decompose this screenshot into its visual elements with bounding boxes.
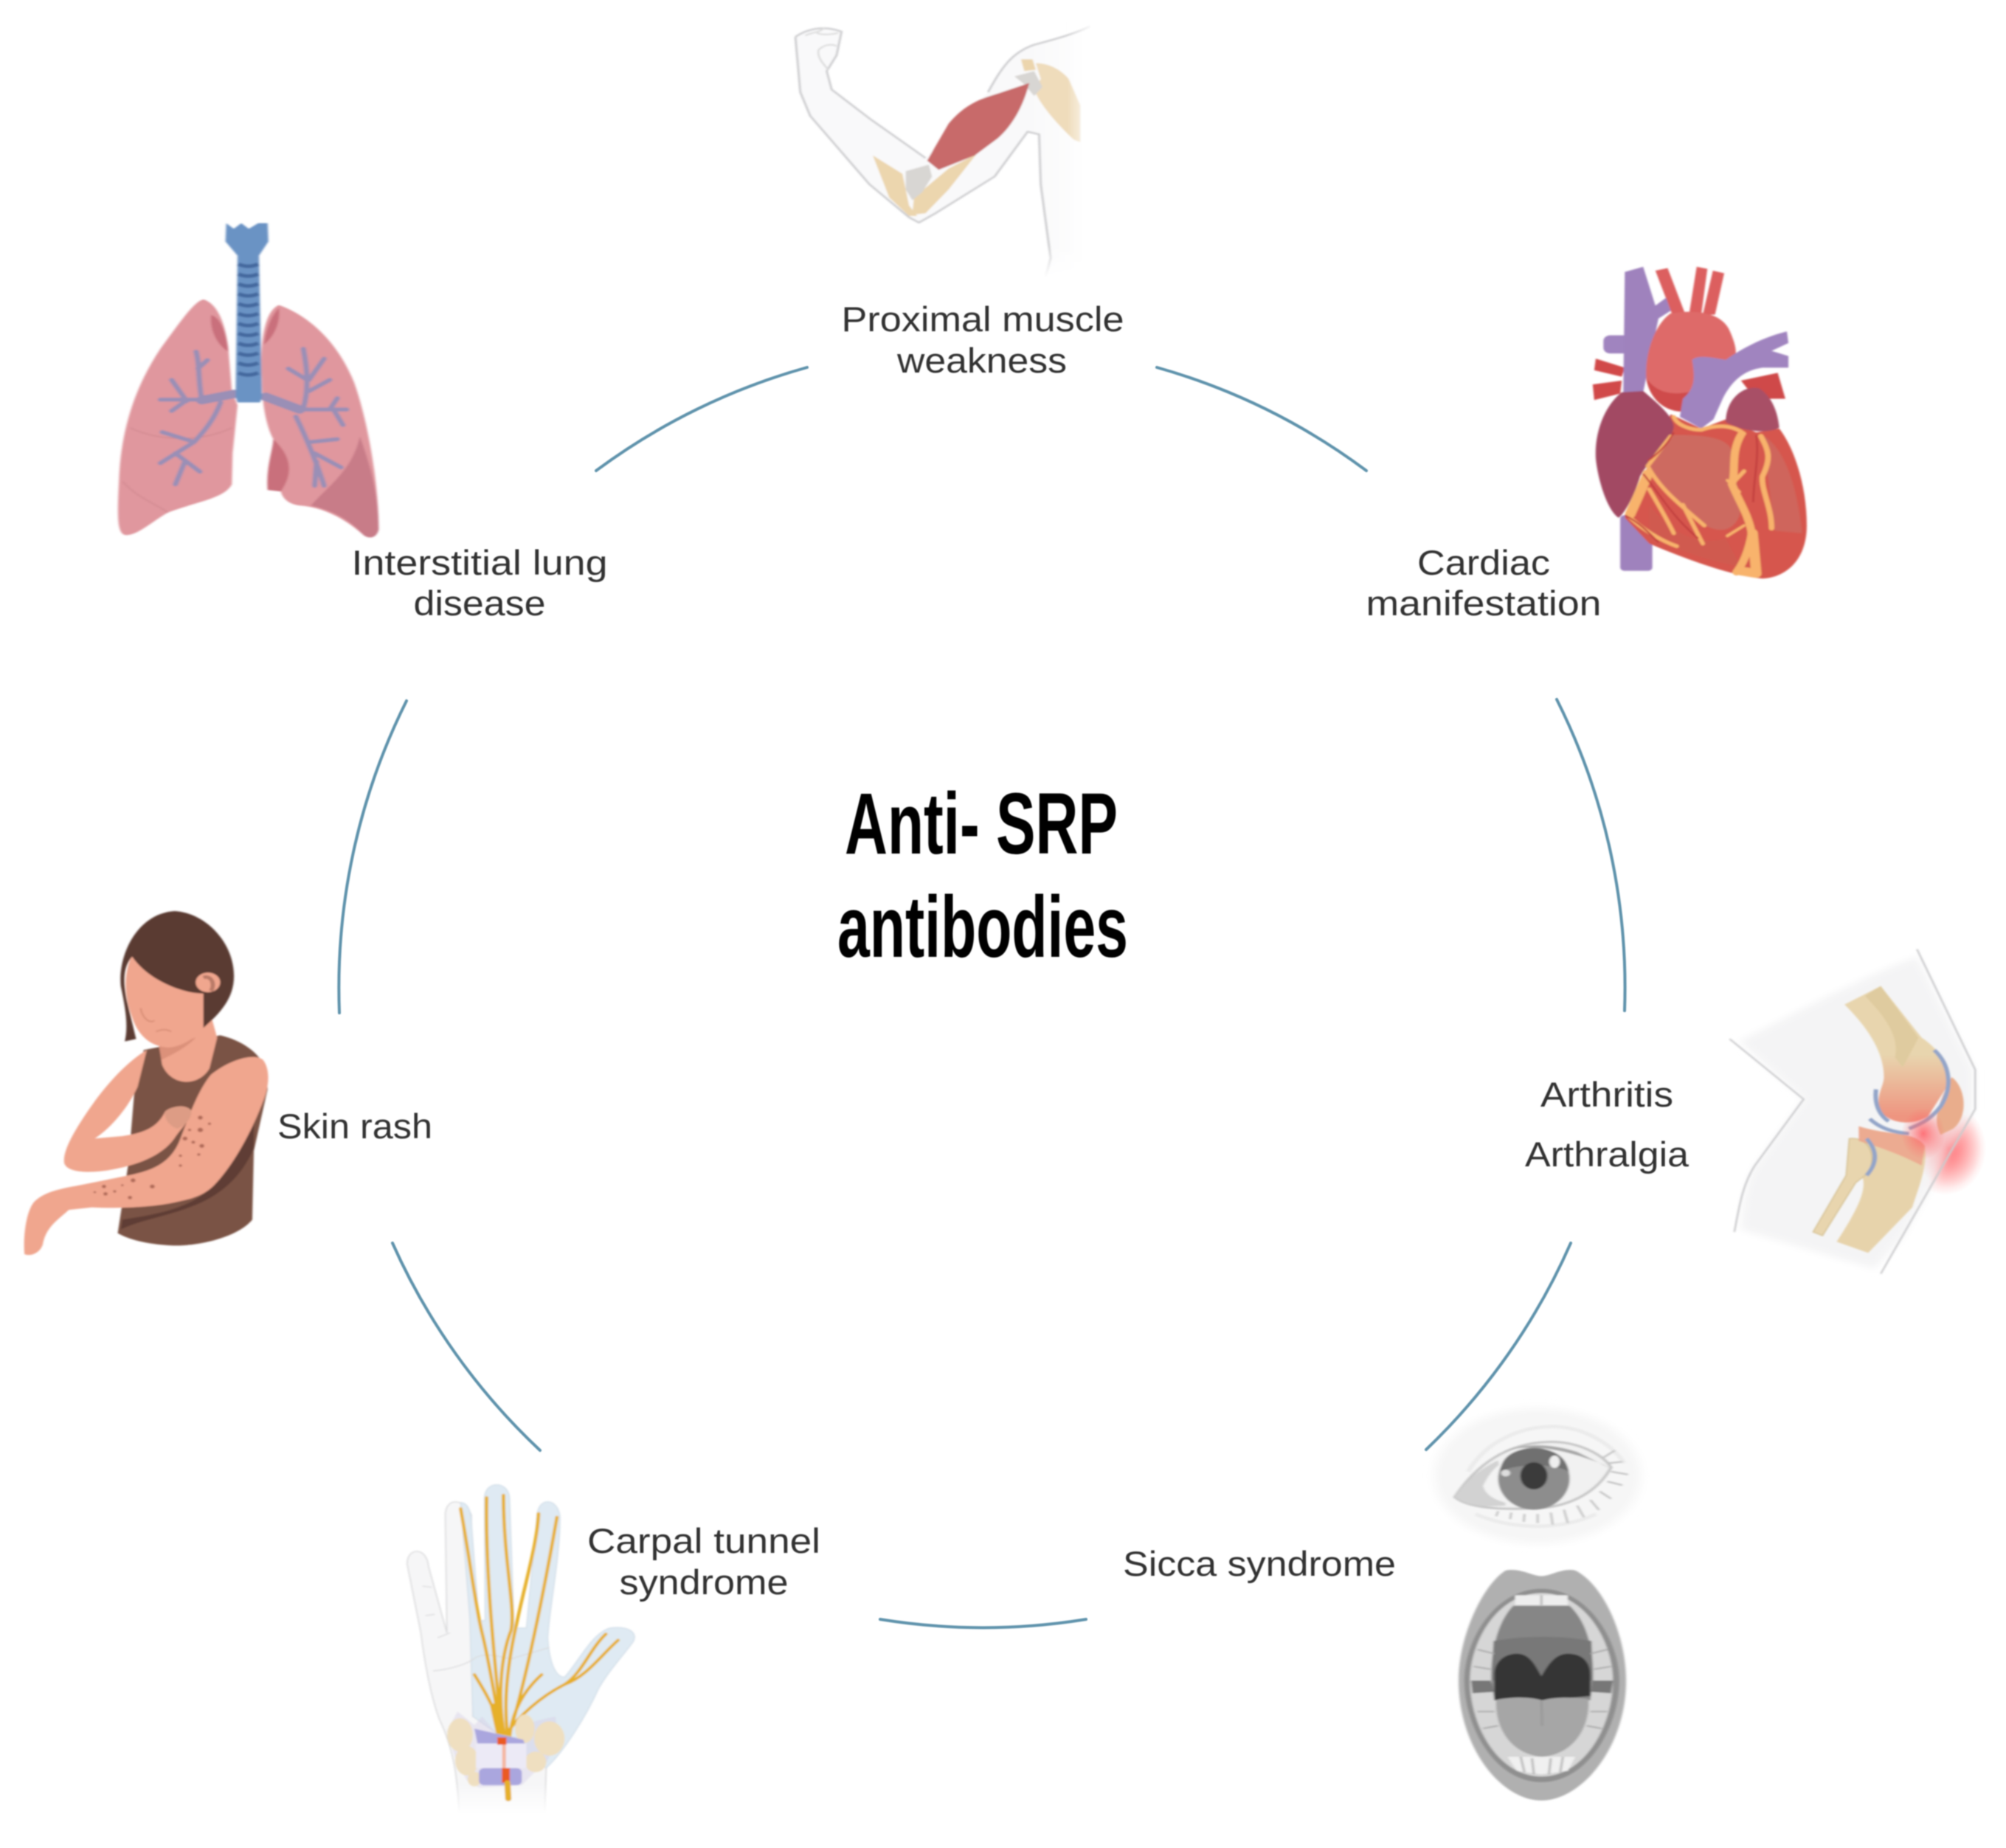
icon: flexed arm with biceps [795,21,1097,279]
connecting ring arcs [339,367,1625,1627]
title: antibodies [837,879,1128,976]
label: arthritis and arthralgia: Arthritis [1540,1075,1673,1114]
label: carpal tunnel syndrome: Carpal tunnel [587,1521,820,1560]
label: arthritis and arthralgia: Arthralgia [1525,1135,1689,1174]
label: proximal muscle weakness: Proximal muscle [841,300,1124,339]
label: cardiac manifestation: manifestation [1366,584,1601,623]
label: carpal tunnel syndrome [587,1521,820,1602]
icon: inflamed knee joint [1729,949,1986,1274]
label: cardiac manifestation [1366,543,1601,623]
label: cardiac manifestation: Cardiac [1417,543,1550,582]
label: arthritis and arthralgia [1525,1075,1689,1174]
label: skin rash: Skin rash [277,1107,432,1146]
icon: eye [1434,1408,1641,1543]
icon: person with skin rash [24,911,268,1255]
label: sicca syndrome: Sicca syndrome [1123,1544,1396,1583]
icon: open mouth [1459,1570,1626,1801]
title [837,775,1128,976]
label: proximal muscle weakness: weakness [896,341,1067,380]
label: proximal muscle weakness [841,300,1124,380]
icon: heart [1593,267,1807,578]
label: carpal tunnel syndrome: syndrome [620,1563,788,1602]
label: interstitial lung disease: disease [413,584,546,623]
label: interstitial lung disease: Interstitial lung [351,543,608,582]
icon: lungs and trachea [118,224,378,538]
icon: hand with carpal tunnel nerves [407,1484,634,1813]
title: Anti- SRP [845,775,1118,873]
label: interstitial lung disease [351,543,608,623]
